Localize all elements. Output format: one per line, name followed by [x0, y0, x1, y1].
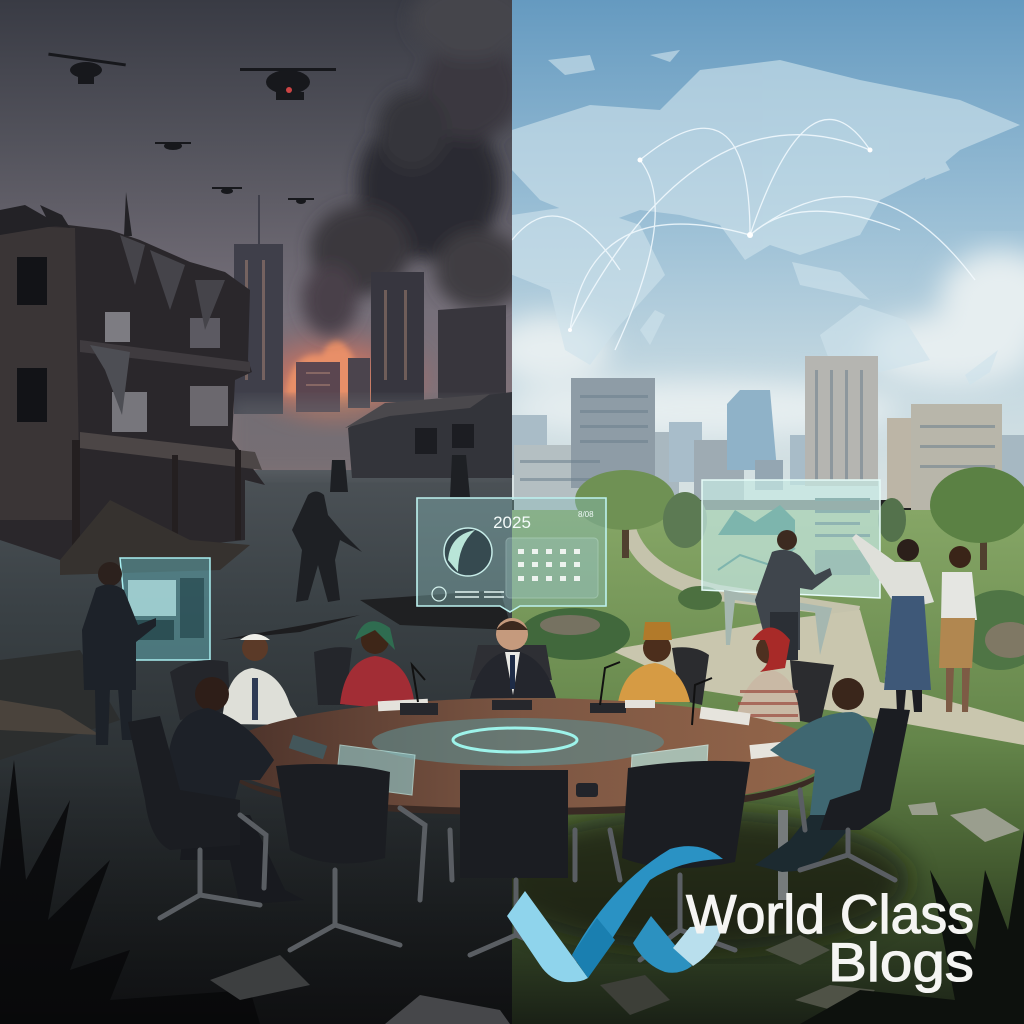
hologram: right [702, 480, 880, 598]
trees [575, 467, 1024, 570]
fire glow [273, 328, 430, 430]
dark foreground plants [0, 760, 260, 1024]
front chairs [128, 708, 910, 878]
hologram: center 2025 panel: 8/08 [578, 510, 594, 519]
seated delegates behind table [222, 618, 800, 725]
flames [285, 340, 366, 395]
city buildings [512, 356, 1024, 515]
world map [482, 50, 1020, 385]
table hologram cards [336, 745, 708, 795]
table scene [128, 618, 910, 960]
chair bases [160, 790, 895, 960]
flower bushes [520, 586, 1024, 670]
network arcs [512, 119, 975, 350]
clouds [490, 250, 1024, 438]
hologram: center 2025 panel: 2025 [493, 513, 531, 532]
road debris foreground [360, 590, 512, 630]
round table [220, 698, 830, 812]
distant skyscrapers [234, 195, 506, 414]
standing figures right [755, 530, 977, 712]
stones and grass [600, 802, 1020, 1015]
background: war-torn left side [0, 0, 530, 1024]
table items [289, 662, 811, 797]
legs under table [778, 810, 788, 900]
ground haze [232, 392, 456, 472]
logo: World Class Blogs [507, 846, 974, 993]
logo: World Class Blogs: Blogs [828, 931, 974, 993]
hologram: left [120, 558, 210, 660]
logo text: World Class [686, 883, 974, 945]
park paths [622, 528, 860, 618]
hologram: center 2025 panel [417, 498, 606, 612]
drones [48, 53, 336, 204]
background: peaceful right side [482, 0, 1024, 1024]
person: standing left presenter [82, 562, 156, 745]
lawn [512, 510, 1024, 1024]
ruined building [0, 192, 265, 575]
logo mark [507, 846, 723, 982]
delegate front left [168, 677, 304, 905]
table ground shadow [490, 810, 910, 950]
distant ruined house [345, 392, 512, 478]
chair backs behind table [170, 645, 834, 725]
smoke plume [302, 0, 530, 336]
info stand [724, 590, 832, 655]
soldiers [292, 455, 470, 602]
table glass center [372, 718, 664, 766]
delegate front right [755, 678, 878, 872]
